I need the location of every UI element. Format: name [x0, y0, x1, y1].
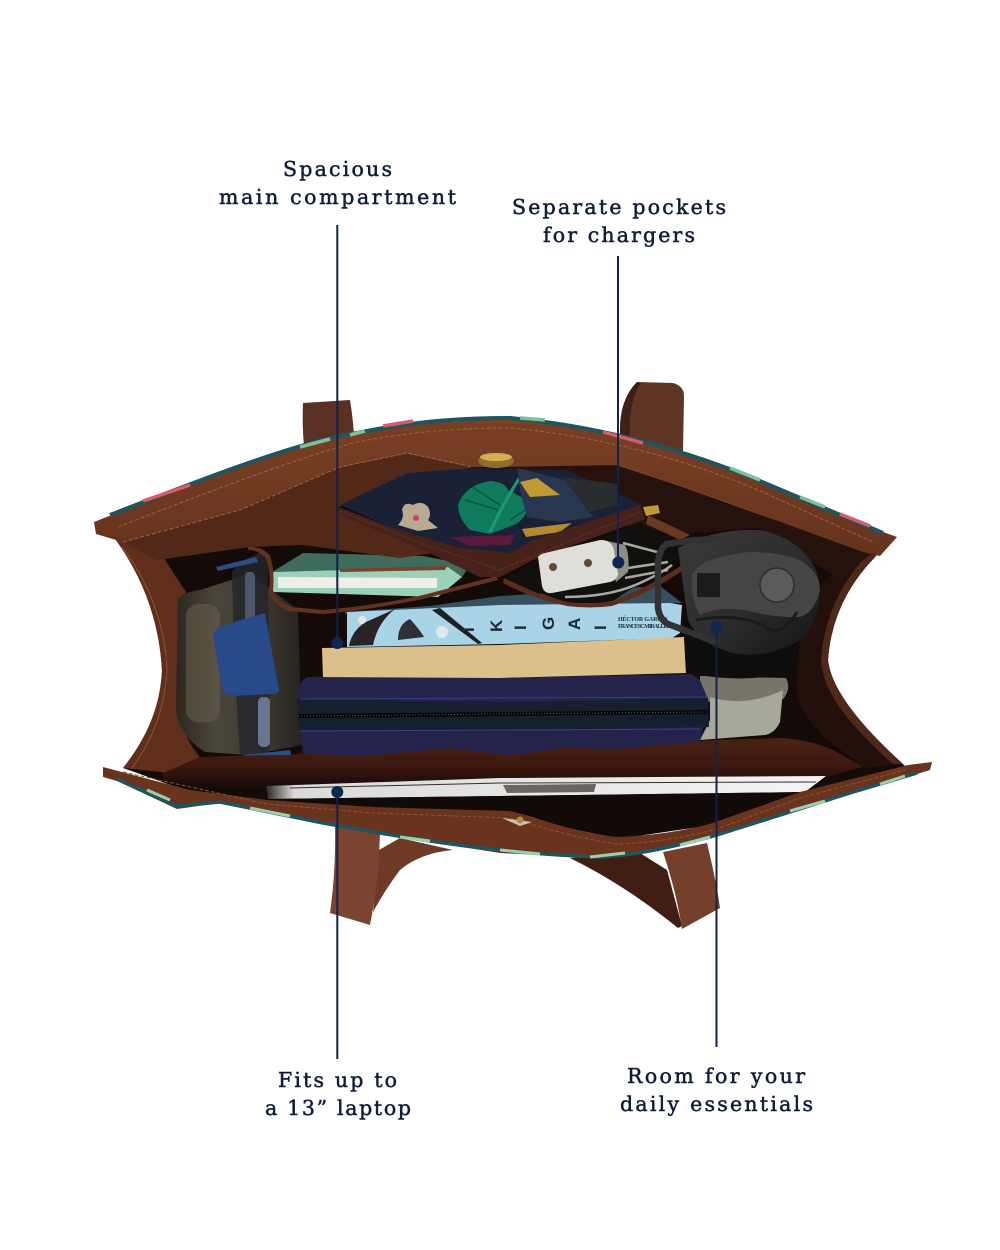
flower patch	[398, 503, 438, 531]
dark upper interior panel	[470, 465, 873, 580]
gold trim	[522, 523, 572, 537]
inner zip pouch	[517, 468, 593, 522]
mint notebook	[272, 553, 470, 597]
label text	[219, 157, 457, 209]
carry loop	[658, 539, 733, 641]
zip pull and tab	[643, 505, 690, 540]
back left handle	[303, 400, 354, 446]
book authors: HÉCTOR GARCÍA	[618, 615, 669, 623]
dark tassel	[563, 477, 618, 512]
front left handle	[330, 826, 453, 925]
book title letters: I	[591, 625, 610, 630]
book page block	[322, 637, 686, 679]
floral trim accents	[147, 776, 905, 857]
callout: room for daily essentials	[620, 621, 813, 1116]
cap button	[760, 568, 794, 602]
navy pencil case	[297, 674, 709, 760]
label text	[620, 1064, 813, 1116]
front flap interior	[268, 792, 810, 838]
book title letters: I	[459, 627, 478, 632]
brass snap button	[478, 453, 514, 468]
bag interior base	[118, 460, 905, 839]
label text	[265, 1068, 411, 1120]
blue Ikigai book	[347, 603, 682, 647]
brown fabric lining fold	[163, 738, 863, 790]
charger pocket edge	[503, 558, 694, 608]
book authors: FRANCESC MIRALLES	[618, 624, 671, 630]
right side gusset	[796, 554, 903, 768]
leader line	[710, 621, 722, 1047]
cables	[565, 543, 672, 597]
front right handle	[570, 843, 720, 929]
glass food container	[176, 552, 302, 760]
leader line	[331, 786, 343, 1059]
label text: Room for your	[627, 1064, 805, 1088]
bottle cap	[678, 530, 819, 655]
book title letters: I	[511, 625, 530, 630]
label text: Spacious	[283, 157, 392, 181]
back right handle	[620, 382, 684, 452]
small pocket edge	[248, 547, 498, 614]
charger pocket lining	[505, 523, 690, 603]
book authors	[618, 615, 671, 630]
label text: daily essentials	[620, 1092, 813, 1116]
leader line	[331, 225, 343, 649]
label text: Fits up to	[278, 1068, 397, 1092]
lower back leather panel	[123, 453, 473, 560]
white wall charger	[538, 540, 629, 593]
front rim leather band	[103, 762, 932, 858]
pink trim	[450, 535, 515, 546]
label text: main compartment	[219, 185, 457, 209]
callout: fits up to a 13 inch laptop	[265, 786, 411, 1120]
hinge	[697, 573, 720, 597]
pocket zipper lip	[337, 505, 645, 577]
tote bag photo illustration	[94, 382, 932, 929]
green leaf patch	[458, 474, 528, 534]
laptop edge	[266, 776, 826, 799]
book title letters: A	[565, 618, 584, 630]
book title letters: K	[487, 619, 506, 632]
blue lid clip	[213, 613, 279, 696]
book title letters	[459, 617, 610, 632]
book title letters: G	[539, 617, 558, 630]
label text	[512, 195, 726, 247]
left side gusset	[114, 538, 215, 778]
leader line	[612, 256, 624, 568]
gold zipper pull	[520, 478, 560, 497]
callout: separate pockets for chargers	[512, 195, 726, 568]
pocket opening	[340, 468, 643, 553]
label text: a 13” laptop	[265, 1096, 411, 1120]
callout: spacious main compartment	[219, 157, 457, 649]
label text: for chargers	[543, 223, 695, 247]
dark top of blue book	[345, 586, 682, 614]
floral trim accents	[143, 418, 870, 526]
back rim leather band	[94, 417, 897, 556]
label text: Separate pockets	[512, 195, 726, 219]
insulated water bottle	[658, 530, 820, 678]
front snap	[502, 816, 532, 826]
sage bottle sleeve	[700, 676, 788, 740]
